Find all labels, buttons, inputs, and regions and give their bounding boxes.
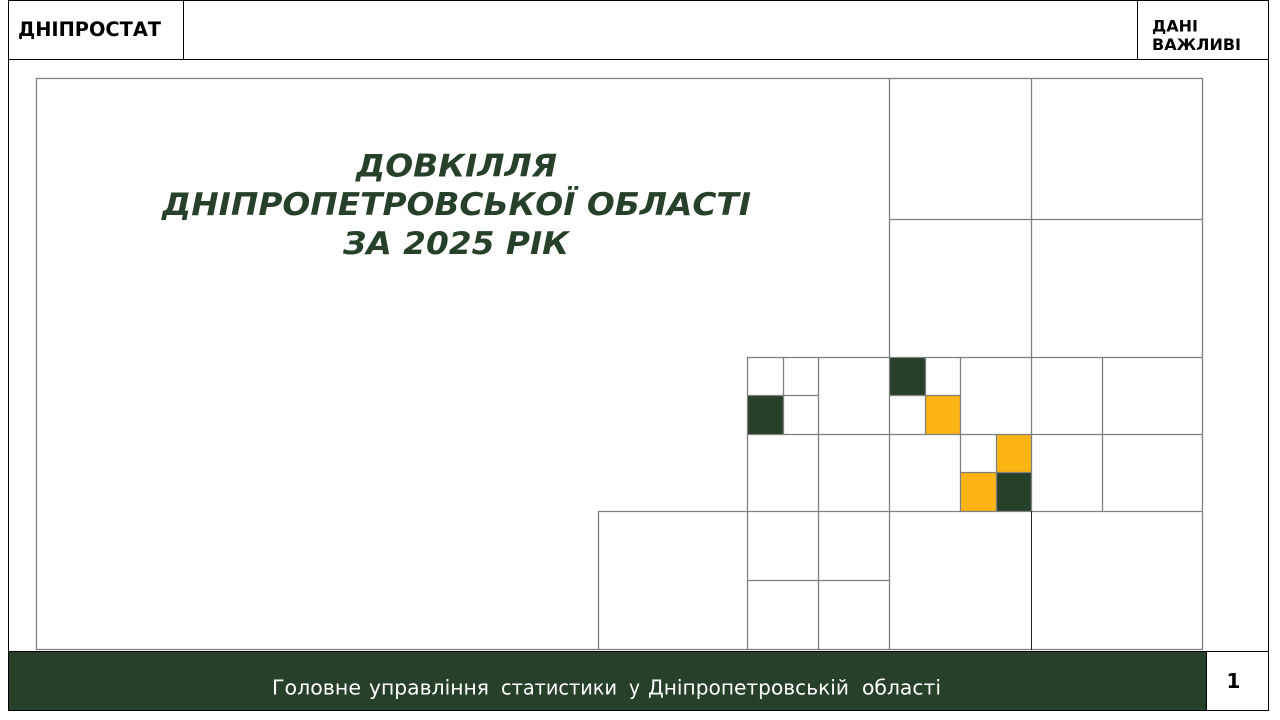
grid lines [598,78,1203,650]
coloured squares [747,357,1032,511]
header label: Dniprostat: ДНІПРОСТАТ [18,18,162,41]
header label: data matter: ВАЖЛИВІ [1152,35,1241,54]
footer text: управління [369,676,489,700]
title: ДОВКІЛЛЯ [355,148,557,184]
footer text: статистики [501,676,617,700]
title: ЗА 2025 РІК [342,226,571,262]
footer text: Дніпропетровській [648,676,849,700]
decorative grid panel [36,78,1203,650]
footer text: області [862,676,941,700]
footer text [272,676,941,700]
footer text: Головне [272,676,361,700]
title: ДНІПРОПЕТРОВСЬКОЇ ОБЛАСТІ [161,185,751,223]
header label: data matter: ДАНІ [1152,16,1198,36]
page number cell [1206,652,1268,710]
footer text: у [629,676,640,700]
grid outer frame [36,78,1202,650]
title [161,148,751,262]
footer bar [8,652,1206,710]
header label: data matter [1152,16,1241,54]
page number: 1 [1227,669,1240,693]
